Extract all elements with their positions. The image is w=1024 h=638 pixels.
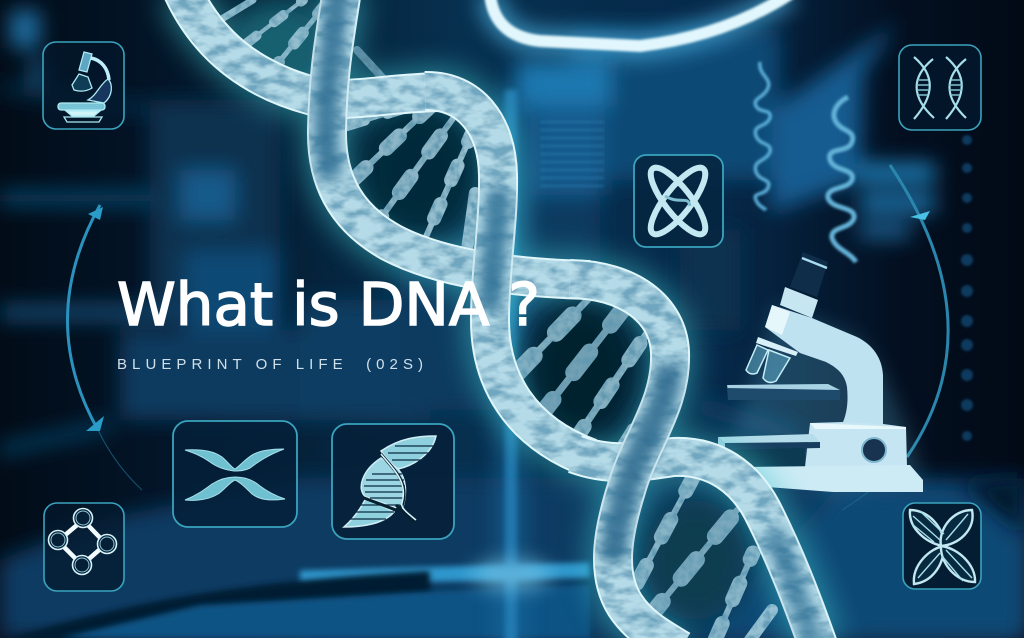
floating squiggle helix 2: [828, 97, 856, 262]
strand 2 middle (front): [425, 91, 590, 458]
rungs upper: [220, 0, 475, 257]
strand 1 lower (front): [570, 279, 680, 638]
microscope: [718, 252, 923, 492]
eyepiece: [790, 252, 828, 297]
microscope head: [780, 287, 818, 318]
overhead ring light: [490, 0, 790, 46]
icon: crossing strands: [173, 421, 297, 527]
strand 2 lower: [575, 454, 818, 638]
lower stage: [718, 434, 820, 467]
strand 1 upper (front): [326, 0, 590, 280]
left circular arc with markers: [67, 205, 142, 490]
icon: molecule diamond: [44, 503, 124, 591]
right circular arc with marker: [842, 165, 948, 510]
icon: paired helices: [899, 45, 981, 130]
rungs middle: [517, 287, 647, 452]
knob: [862, 438, 886, 462]
strand 2 upper: [182, 0, 440, 99]
microscope base block: [805, 422, 907, 467]
objective lenses: [746, 337, 798, 382]
icon: knot: [634, 155, 723, 247]
icon: four-leaf strands: [903, 503, 981, 589]
icon: microscope: [43, 42, 124, 129]
rungs lower: [637, 470, 772, 638]
base plate: [743, 465, 923, 492]
microscope glow: [730, 305, 923, 492]
title: What is DNA ?: [117, 270, 540, 339]
microscope arm: [765, 305, 883, 427]
floating squiggle helix 1: [755, 62, 770, 210]
helix glow: [182, 0, 818, 638]
upper stage: [727, 384, 840, 400]
teal inner loop haze: [230, 0, 745, 620]
DNA double helix: [182, 0, 818, 638]
subtitle: BLUEPRINT OF LIFE (02S): [117, 356, 423, 373]
icon: striped helix: [332, 424, 454, 539]
